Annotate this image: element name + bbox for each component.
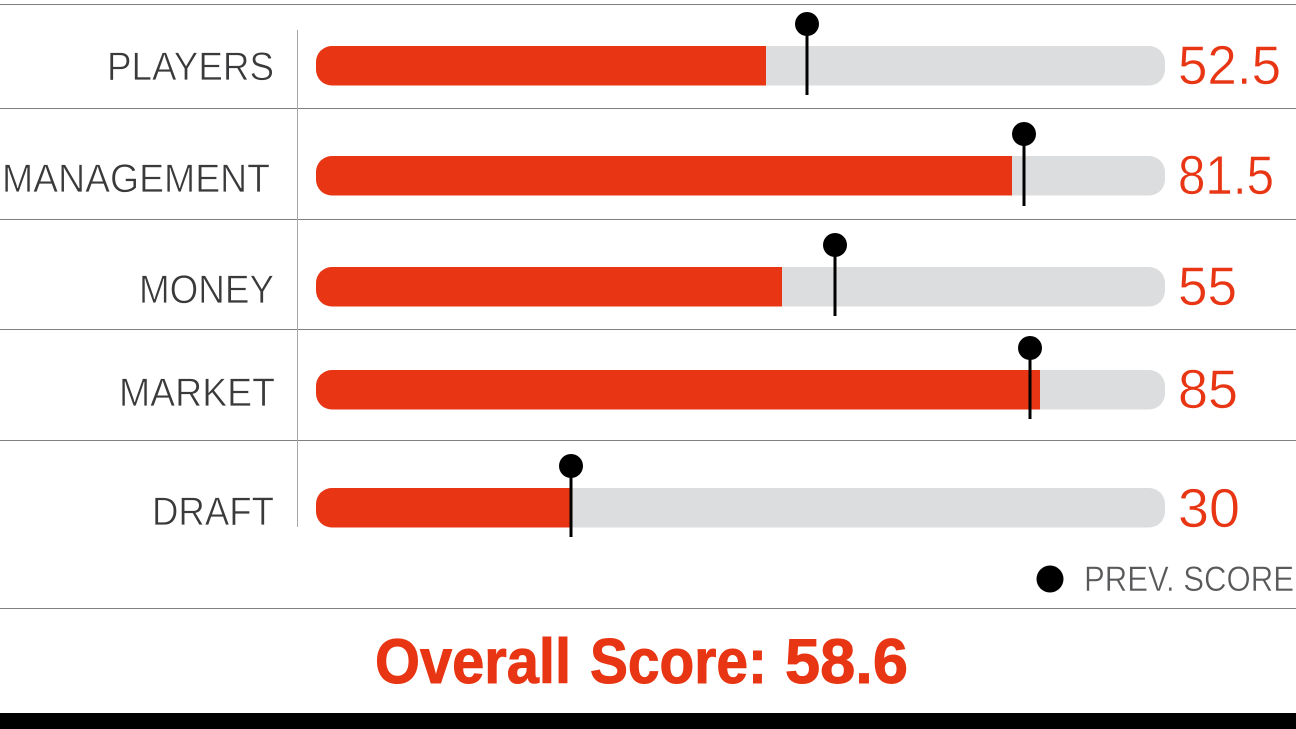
label: management: MANAGEMENT xyxy=(2,157,270,201)
bar: management xyxy=(316,156,1165,196)
bar: market xyxy=(316,370,1165,410)
overall score heading: 58.6 xyxy=(785,627,908,697)
bottom black bar xyxy=(0,713,1296,729)
bar: draft xyxy=(316,488,1165,528)
marker: draft previous score xyxy=(559,454,583,537)
value: money: 55 xyxy=(1178,255,1237,317)
marker: market previous score xyxy=(1018,336,1042,419)
value: players: 52.5 xyxy=(1178,34,1281,96)
row: market xyxy=(119,336,1238,420)
value: market: 85 xyxy=(1178,358,1238,420)
label: draft: DRAFT xyxy=(152,490,274,534)
marker: money previous score xyxy=(823,233,847,316)
row: draft xyxy=(152,454,1240,539)
row: money xyxy=(139,233,1237,317)
row: management xyxy=(2,122,1274,206)
label: money: MONEY xyxy=(139,268,274,312)
marker: players previous score xyxy=(795,12,819,95)
marker: management previous score xyxy=(1012,122,1036,206)
row: players xyxy=(107,12,1281,96)
bar: money xyxy=(316,267,1165,306)
bar: players xyxy=(316,46,1165,86)
label: market: MARKET xyxy=(119,371,275,415)
label: players: PLAYERS xyxy=(107,45,274,89)
value: management: 81.5 xyxy=(1178,144,1274,206)
value: draft: 30 xyxy=(1178,477,1240,539)
overall score heading xyxy=(375,627,908,697)
overall score heading: Score: xyxy=(590,627,767,697)
overall score heading: Overall xyxy=(375,627,571,697)
